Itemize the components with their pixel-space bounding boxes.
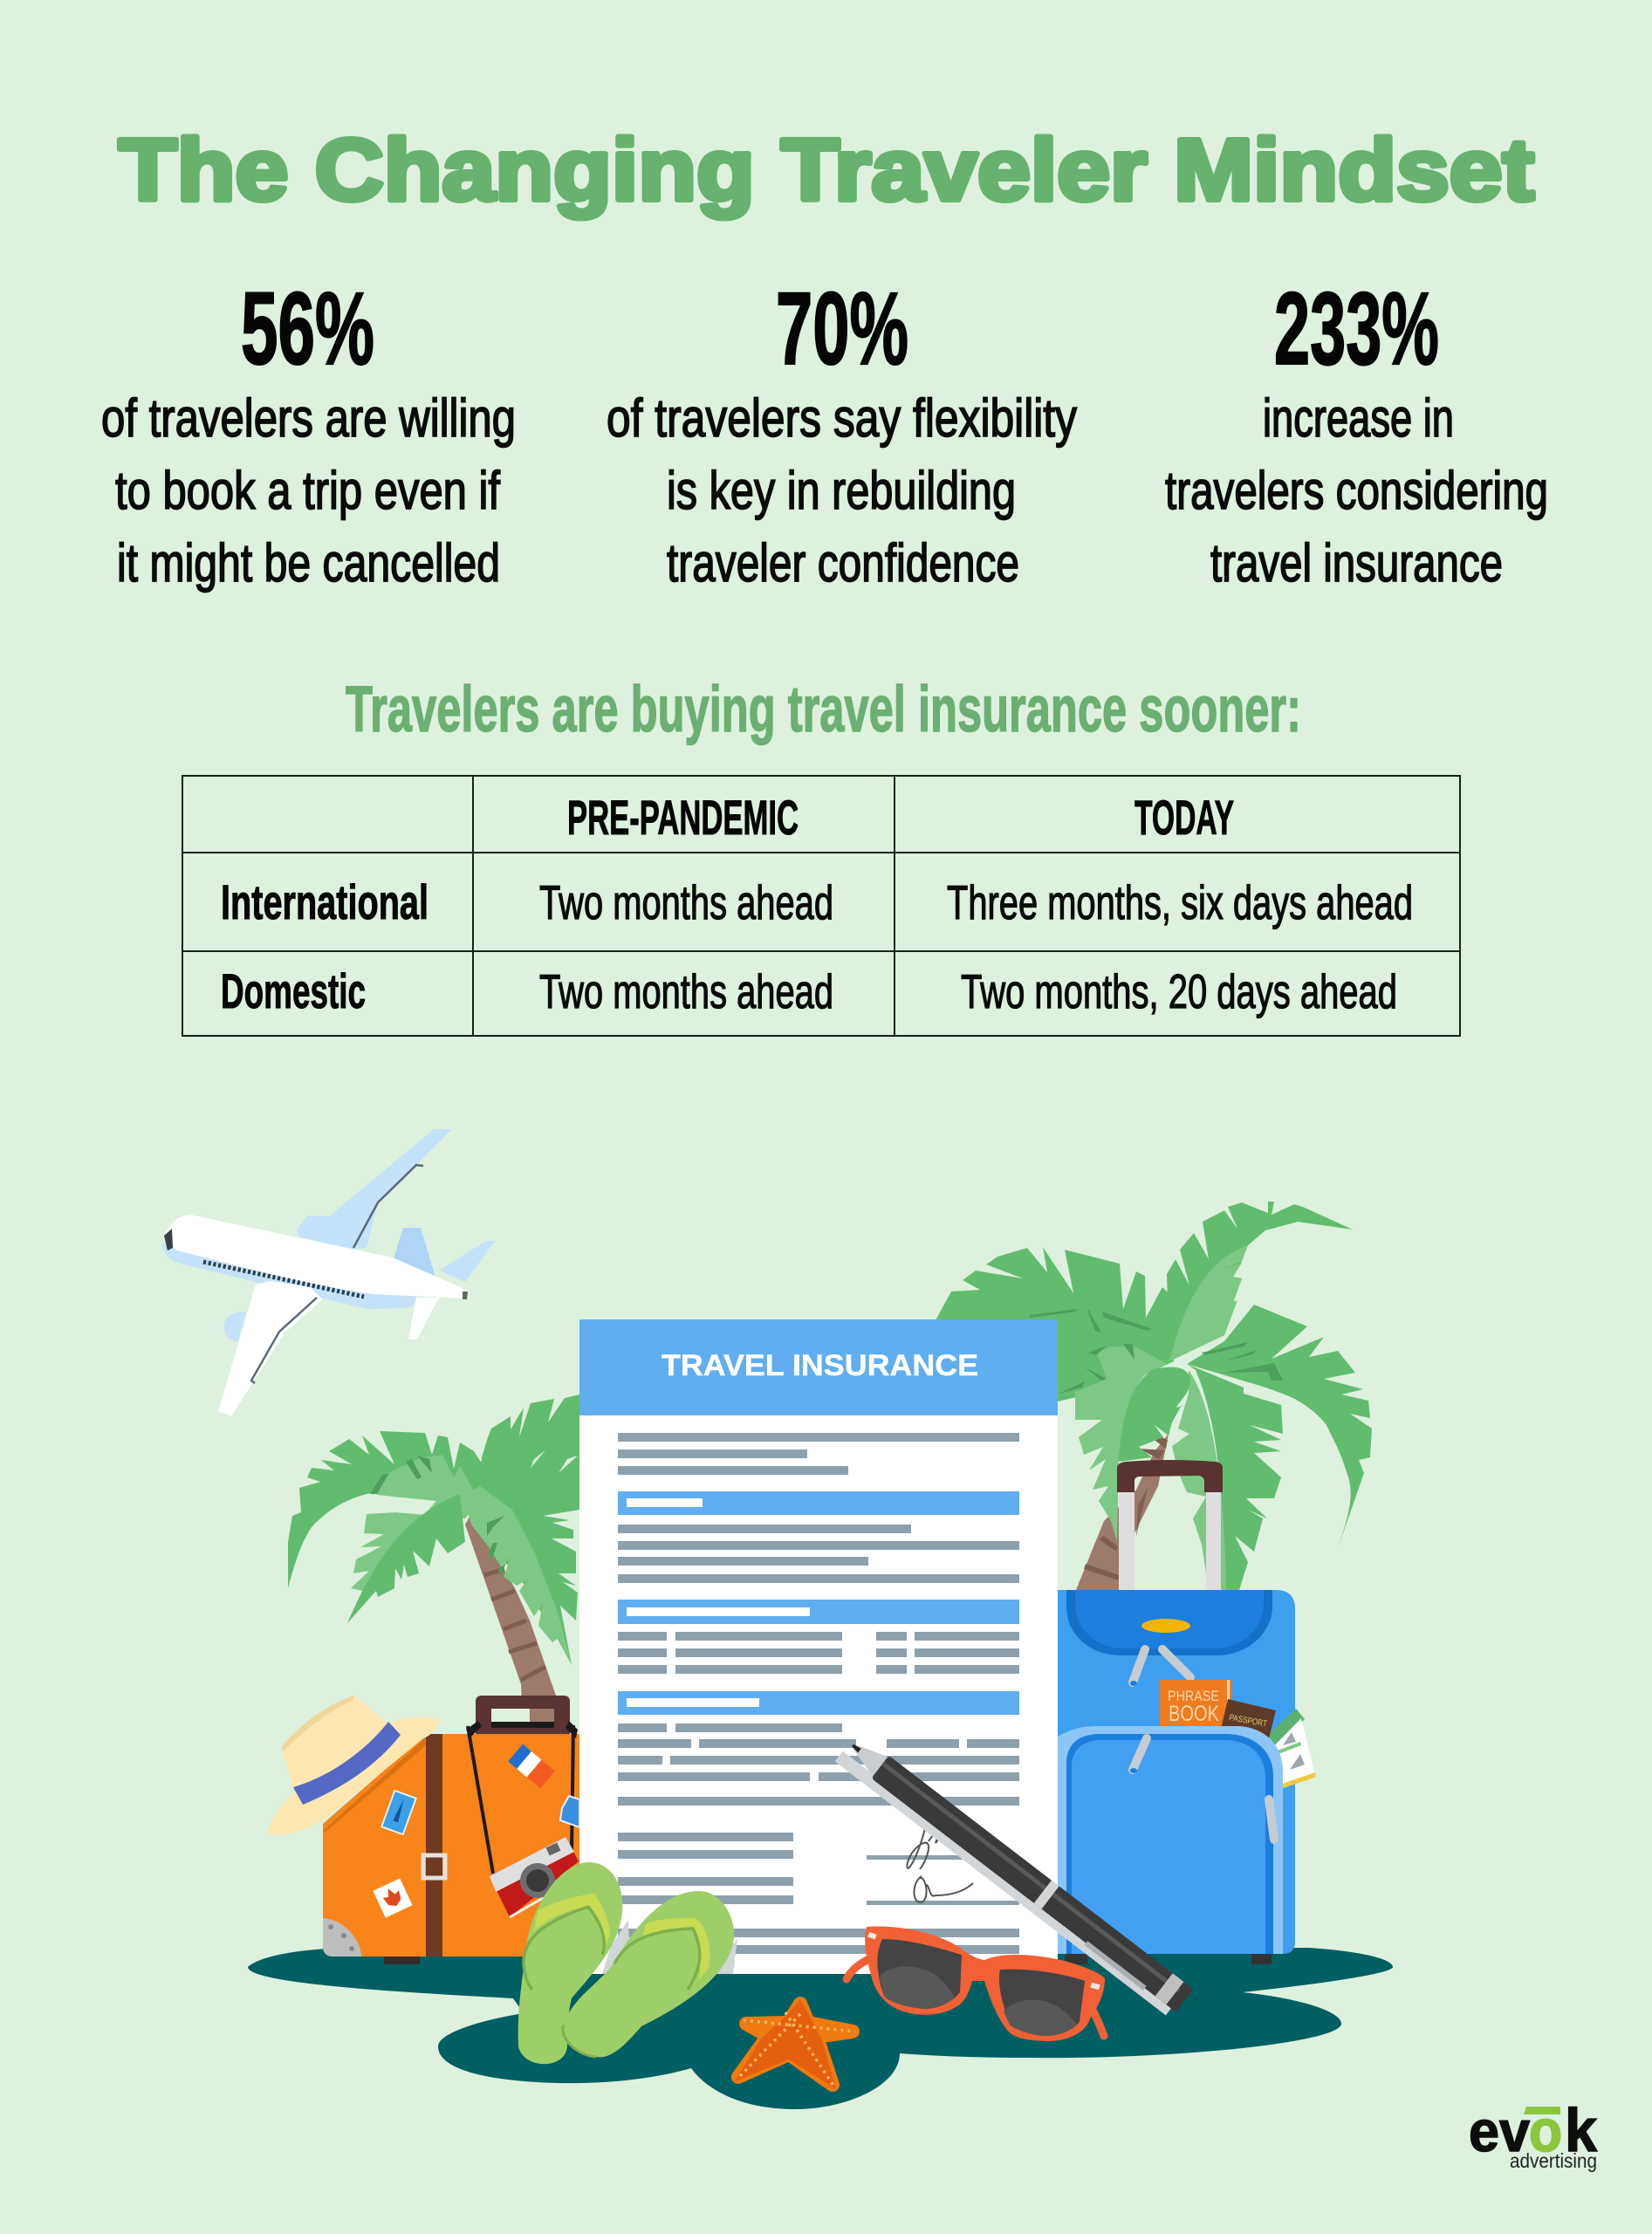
- stat: 233% increase: 233%: [1274, 271, 1439, 387]
- trunk: [1076, 1428, 1169, 1590]
- phrase book: BOOK: [1169, 1702, 1219, 1726]
- icon: starfish: [735, 2000, 855, 2089]
- stat: 70% of travelers: 70%: [776, 271, 908, 387]
- stat: 56% of travelers: [101, 271, 516, 593]
- passport: [1218, 1699, 1276, 1759]
- icon: right suitcase: [1058, 1460, 1316, 1964]
- right flip flop: [563, 1891, 734, 2057]
- comparison table: Two months ahead: [539, 875, 833, 929]
- stat: 233% increase: travelers considering: [1165, 461, 1548, 520]
- icon: sunglasses: [847, 1926, 1105, 2041]
- comparison table: TODAY: [1134, 790, 1234, 845]
- document header: TRAVEL INSURANCE: [661, 1349, 978, 1382]
- ground shadow: [248, 1948, 1393, 2109]
- sticker: maple leaf: [373, 1878, 413, 1918]
- fronds: [288, 1431, 489, 1588]
- logo: evok advertising: [1469, 2096, 1597, 2172]
- stat: 233% increase: increase in: [1263, 388, 1454, 448]
- stat: 56% of travelers: 56%: [241, 271, 374, 387]
- stat: 70% of travelers: [607, 271, 1077, 593]
- stat: 233% increase: [1165, 271, 1548, 593]
- stat: 56% of travelers: it might be cancelled: [117, 533, 500, 593]
- stat: 56% of travelers: to book a trip even if: [115, 461, 501, 520]
- icon: left palm tree: [288, 1395, 579, 1741]
- comparison table: Three months, six days ahead: [947, 875, 1413, 929]
- camera strap: [468, 1725, 573, 1874]
- document header: [579, 1319, 1058, 1415]
- logo: evok advertising: o: [1529, 2098, 1562, 2164]
- logo: evok advertising: advertising: [1510, 2149, 1597, 2172]
- logo: evok advertising: k: [1565, 2096, 1597, 2164]
- title: The Changing Traveler Mindset: [119, 121, 1534, 219]
- comparison table: Two months ahead: [539, 964, 833, 1018]
- sticker: flag: [508, 1744, 555, 1788]
- stat: 70% of travelers: is key in rebuilding: [667, 461, 1016, 520]
- suitcase pocket: [1058, 1726, 1283, 1954]
- document text lines: [618, 1433, 1019, 1954]
- boarding passes: [1261, 1709, 1316, 1793]
- phrase book: PHRASE: [1168, 1688, 1219, 1704]
- comparison table: [182, 776, 1460, 1036]
- passport: PASSPORT: [1228, 1713, 1268, 1730]
- comparison table: Two months, 20 days ahead: [961, 964, 1397, 1018]
- signatures: [907, 1821, 973, 1902]
- stat: 233% increase: travel insurance: [1210, 533, 1503, 593]
- icon: flip flops: [518, 1862, 737, 2064]
- belt and buckle: [423, 1734, 445, 1956]
- pocket zipper pulls: [1130, 1738, 1274, 1840]
- sticker: blue: [560, 1796, 579, 1827]
- suitcase handle: [1117, 1460, 1223, 1593]
- trunk: [465, 1514, 559, 1741]
- icon: airplane: [161, 1129, 495, 1416]
- upper zipper pulls: [1130, 1649, 1190, 1686]
- stat: 70% of travelers: of travelers say flexibility: [607, 388, 1077, 448]
- icon: right palm tree: [936, 1202, 1372, 1590]
- left flip flop: [518, 1862, 622, 2064]
- fronds: [936, 1247, 1174, 1401]
- comparison table: Domestic: [221, 963, 366, 1018]
- comparison table: International: [221, 874, 428, 929]
- icon: straw hat: [267, 1696, 440, 1835]
- icon: pen: [835, 1731, 1194, 2019]
- panel: travel insurance document: [579, 1319, 1058, 1974]
- logo: evok advertising: ev: [1469, 2099, 1530, 2163]
- stat: 70% of travelers: traveler confidence: [667, 533, 1019, 593]
- sticker: eiffel tower: [381, 1791, 416, 1834]
- stat: 56% of travelers: of travelers are willing: [101, 388, 516, 448]
- suitcase handle: [476, 1696, 570, 1737]
- icon: left suitcase: [323, 1696, 579, 1964]
- phrase book: [1160, 1680, 1231, 1745]
- comparison table: PRE-PANDEMIC: [567, 790, 799, 845]
- camera: [490, 1837, 579, 1917]
